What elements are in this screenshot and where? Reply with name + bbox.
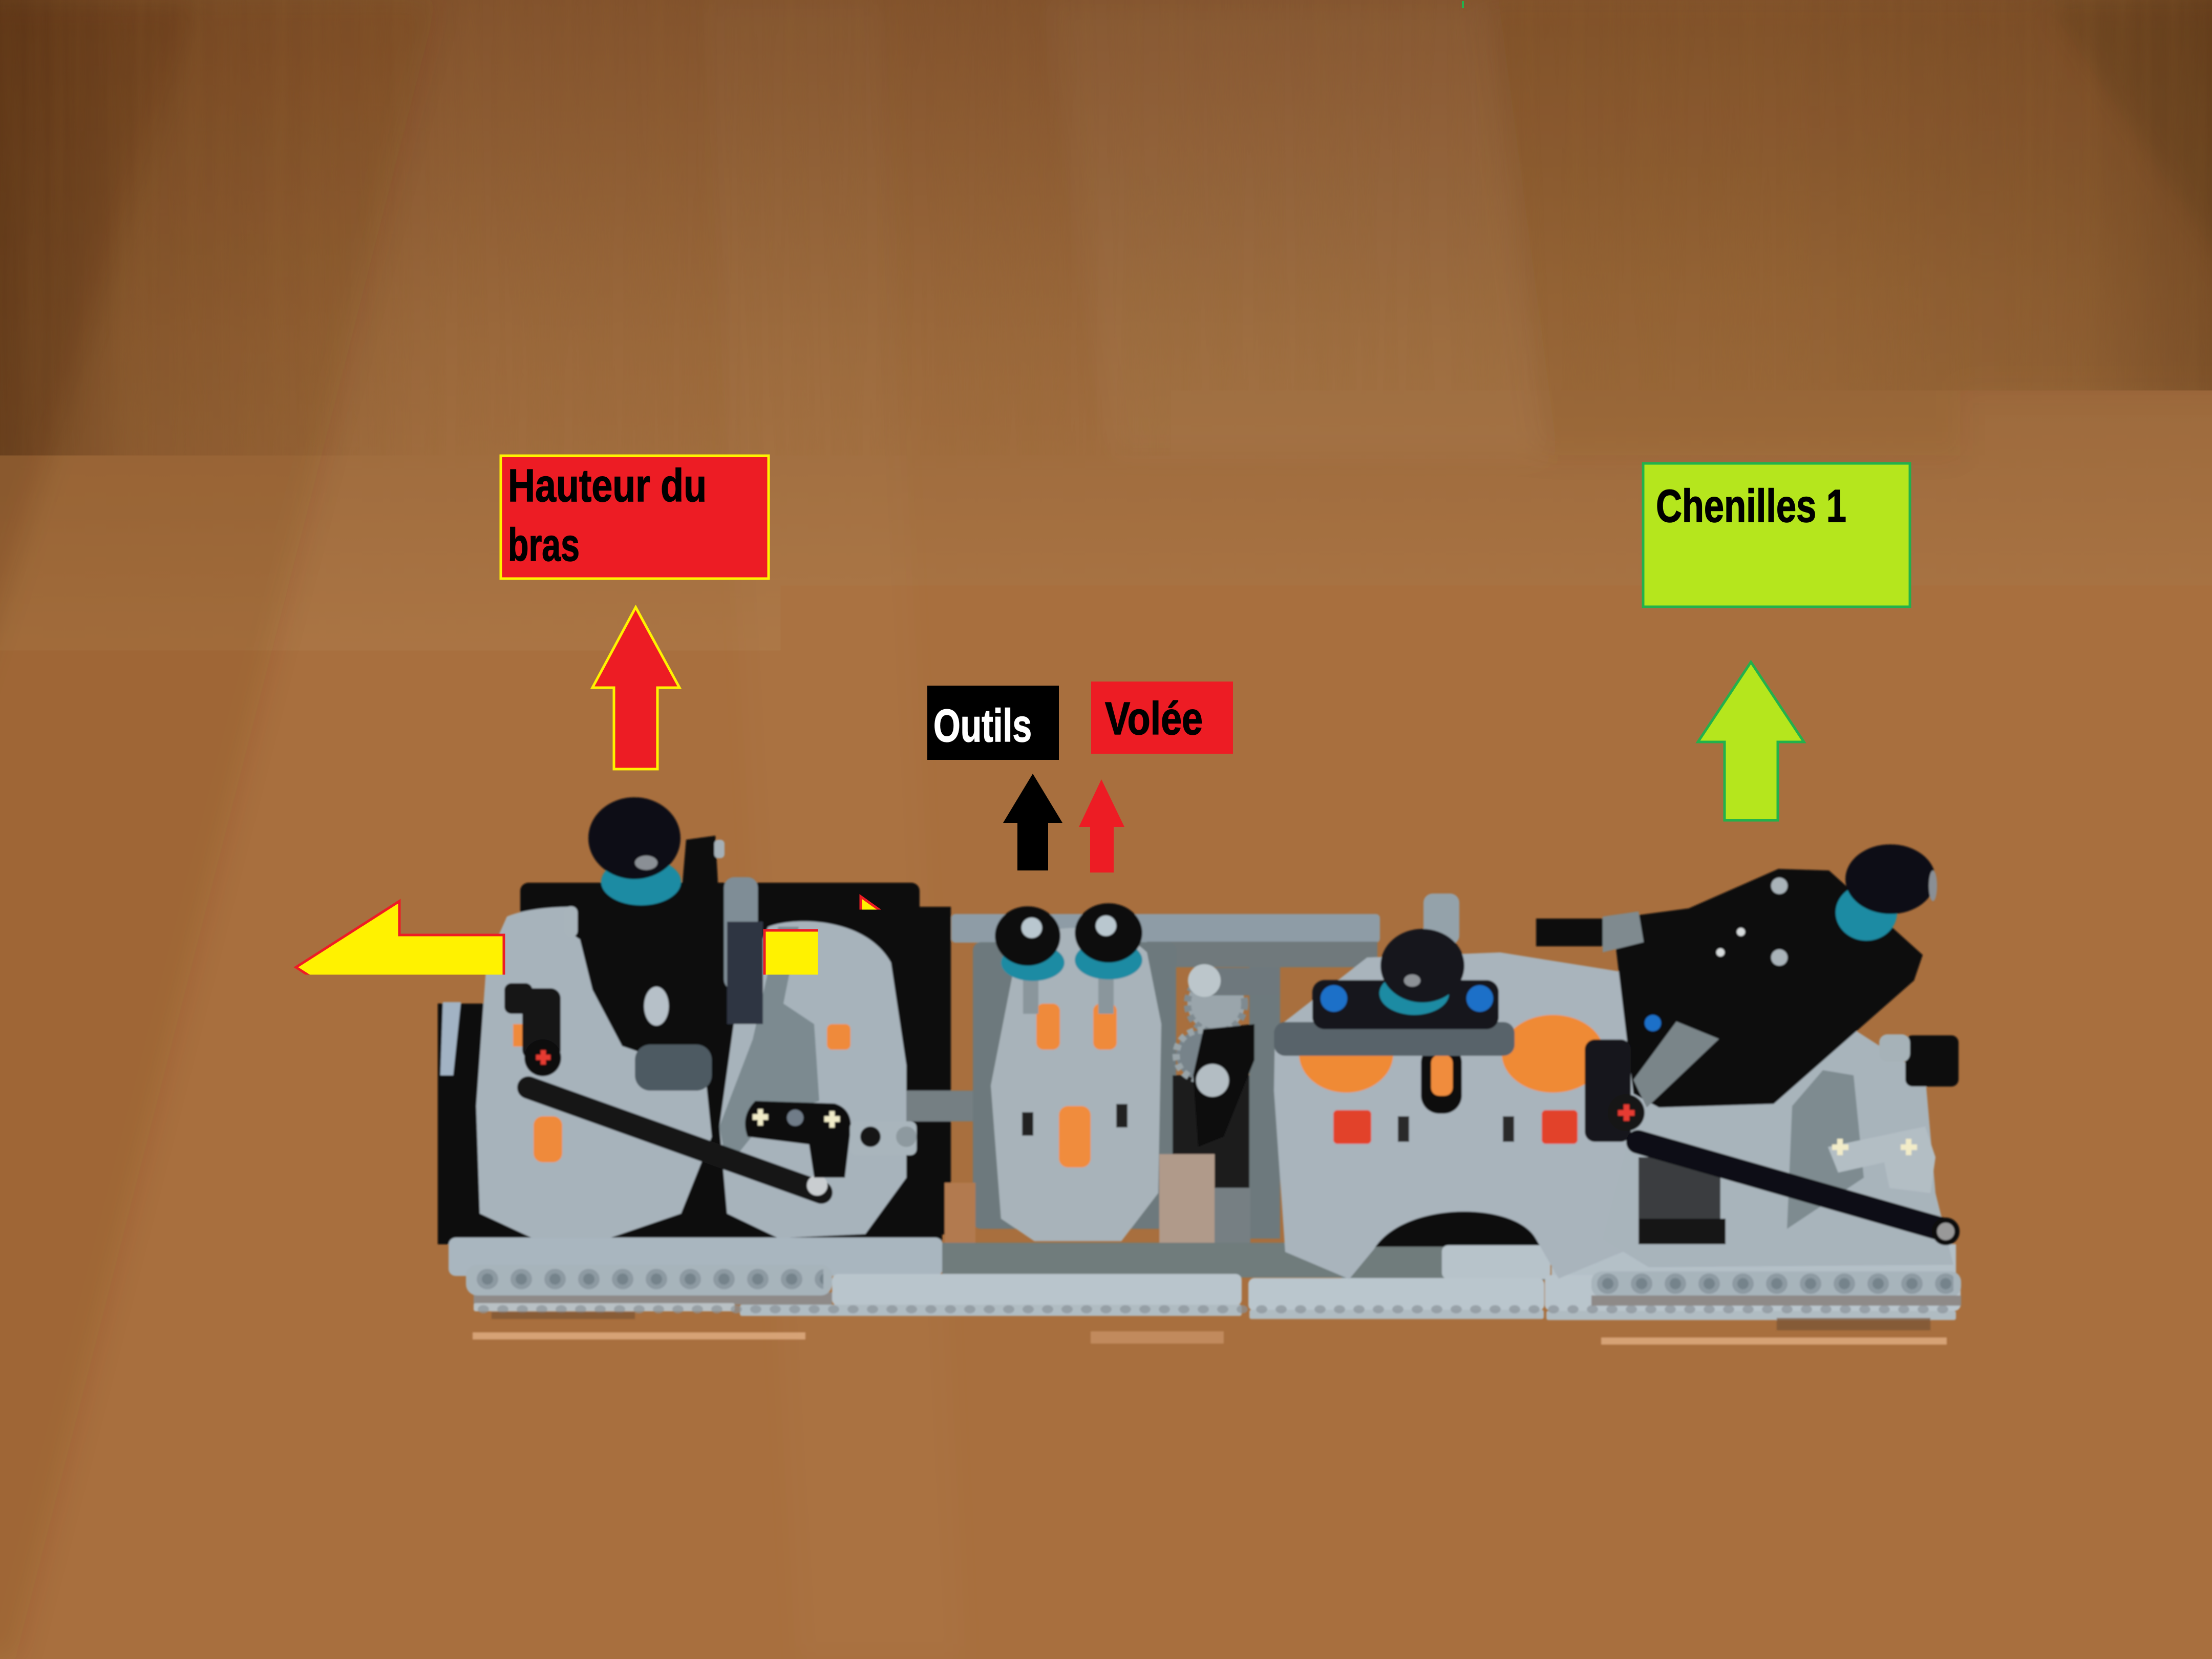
gears and black arm: [1176, 964, 1280, 1147]
top frame beam: [870, 894, 1459, 1244]
knob right: [1836, 844, 1937, 941]
center orange controls: [1022, 973, 1128, 1167]
remote details: [1299, 1015, 1604, 1144]
label: Balancier: Balancier: [198, 1097, 355, 1148]
left joint and rod: [504, 983, 827, 1196]
knob left: [588, 797, 681, 905]
label: Chenilles 1: [1643, 463, 1910, 607]
arrow: yellow right, swing: [764, 897, 955, 1032]
label: Chenilles 2: [1934, 1087, 2190, 1226]
arrow: black up, tools: [1003, 774, 1062, 870]
label: Volée: [1091, 682, 1233, 754]
reflections below model: [473, 1331, 1947, 1345]
black lever assembly right: [1585, 869, 1957, 1243]
label: Outils: Outils: [933, 700, 1032, 752]
arrow: black down, tools: [1007, 1009, 1059, 1116]
arrow: lime up, tracks 1: [1698, 662, 1804, 820]
label: Chenilles 2: Chenilles 2: [1949, 1105, 2146, 1156]
dark gray bracket: [719, 927, 819, 1167]
arrow: lime down, tracks 1: [1688, 1135, 1809, 1325]
left motor unit 2: [719, 921, 906, 1238]
base plates and beams: [449, 1198, 1961, 1330]
label: Hauteur du bras: Hauteur du: [508, 460, 707, 512]
lego controller model: [438, 797, 1961, 1330]
label: Volée: Volée: [1105, 693, 1203, 745]
arrow: red down, arm height: [586, 1114, 695, 1323]
black lever assembly left: [564, 836, 763, 1091]
arrow: red up, arm height: [592, 607, 679, 769]
right arm on remote with knob: [1274, 929, 1515, 1056]
arrow: red up, boom: [1079, 779, 1124, 873]
specks: [1360, 1, 1464, 706]
arrow: green left, tracks 2: [1470, 934, 1645, 1064]
arm left behind: [724, 877, 758, 990]
label: Hauteur du bras: [501, 456, 769, 579]
triangular liftarm: [745, 1101, 917, 1178]
left motor unit 1: [476, 907, 712, 1238]
label: Balancier: [169, 1070, 478, 1242]
arrow: yellow left, swing: [296, 901, 504, 1034]
arrow: green right, tracks 2: [1917, 940, 2109, 1056]
remote control: [1274, 952, 1646, 1279]
black chassis left: [438, 883, 951, 1244]
studded liftarm right: [1591, 1271, 1961, 1306]
right unit: [1536, 919, 1959, 1267]
center motor unit: [991, 928, 1161, 1241]
center knobs: [995, 903, 1142, 981]
orange lever left: [513, 1019, 850, 1162]
arrow: red down, boom: [1081, 1007, 1135, 1122]
label: Outils: [927, 686, 1059, 760]
label: Hauteur du bras: bras: [508, 520, 580, 571]
label: Chenilles 1: Chenilles 1: [1656, 481, 1846, 532]
